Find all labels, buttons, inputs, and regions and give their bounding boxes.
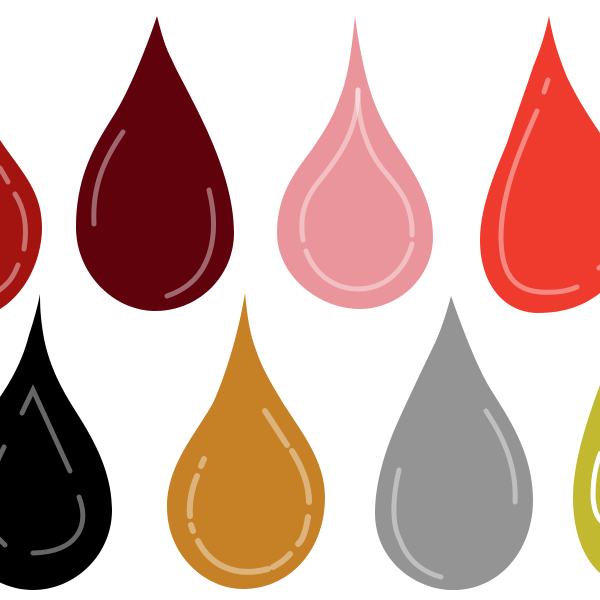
drop: crimson: [0, 60, 42, 316]
drop: amber: [167, 293, 325, 589]
drop: bright red: [480, 16, 600, 313]
drop: black: [0, 294, 112, 590]
drop: olive: [573, 385, 600, 573]
drop: grey: [375, 296, 533, 590]
drop: pink: [277, 16, 433, 309]
drop: dark maroon: [76, 16, 234, 311]
